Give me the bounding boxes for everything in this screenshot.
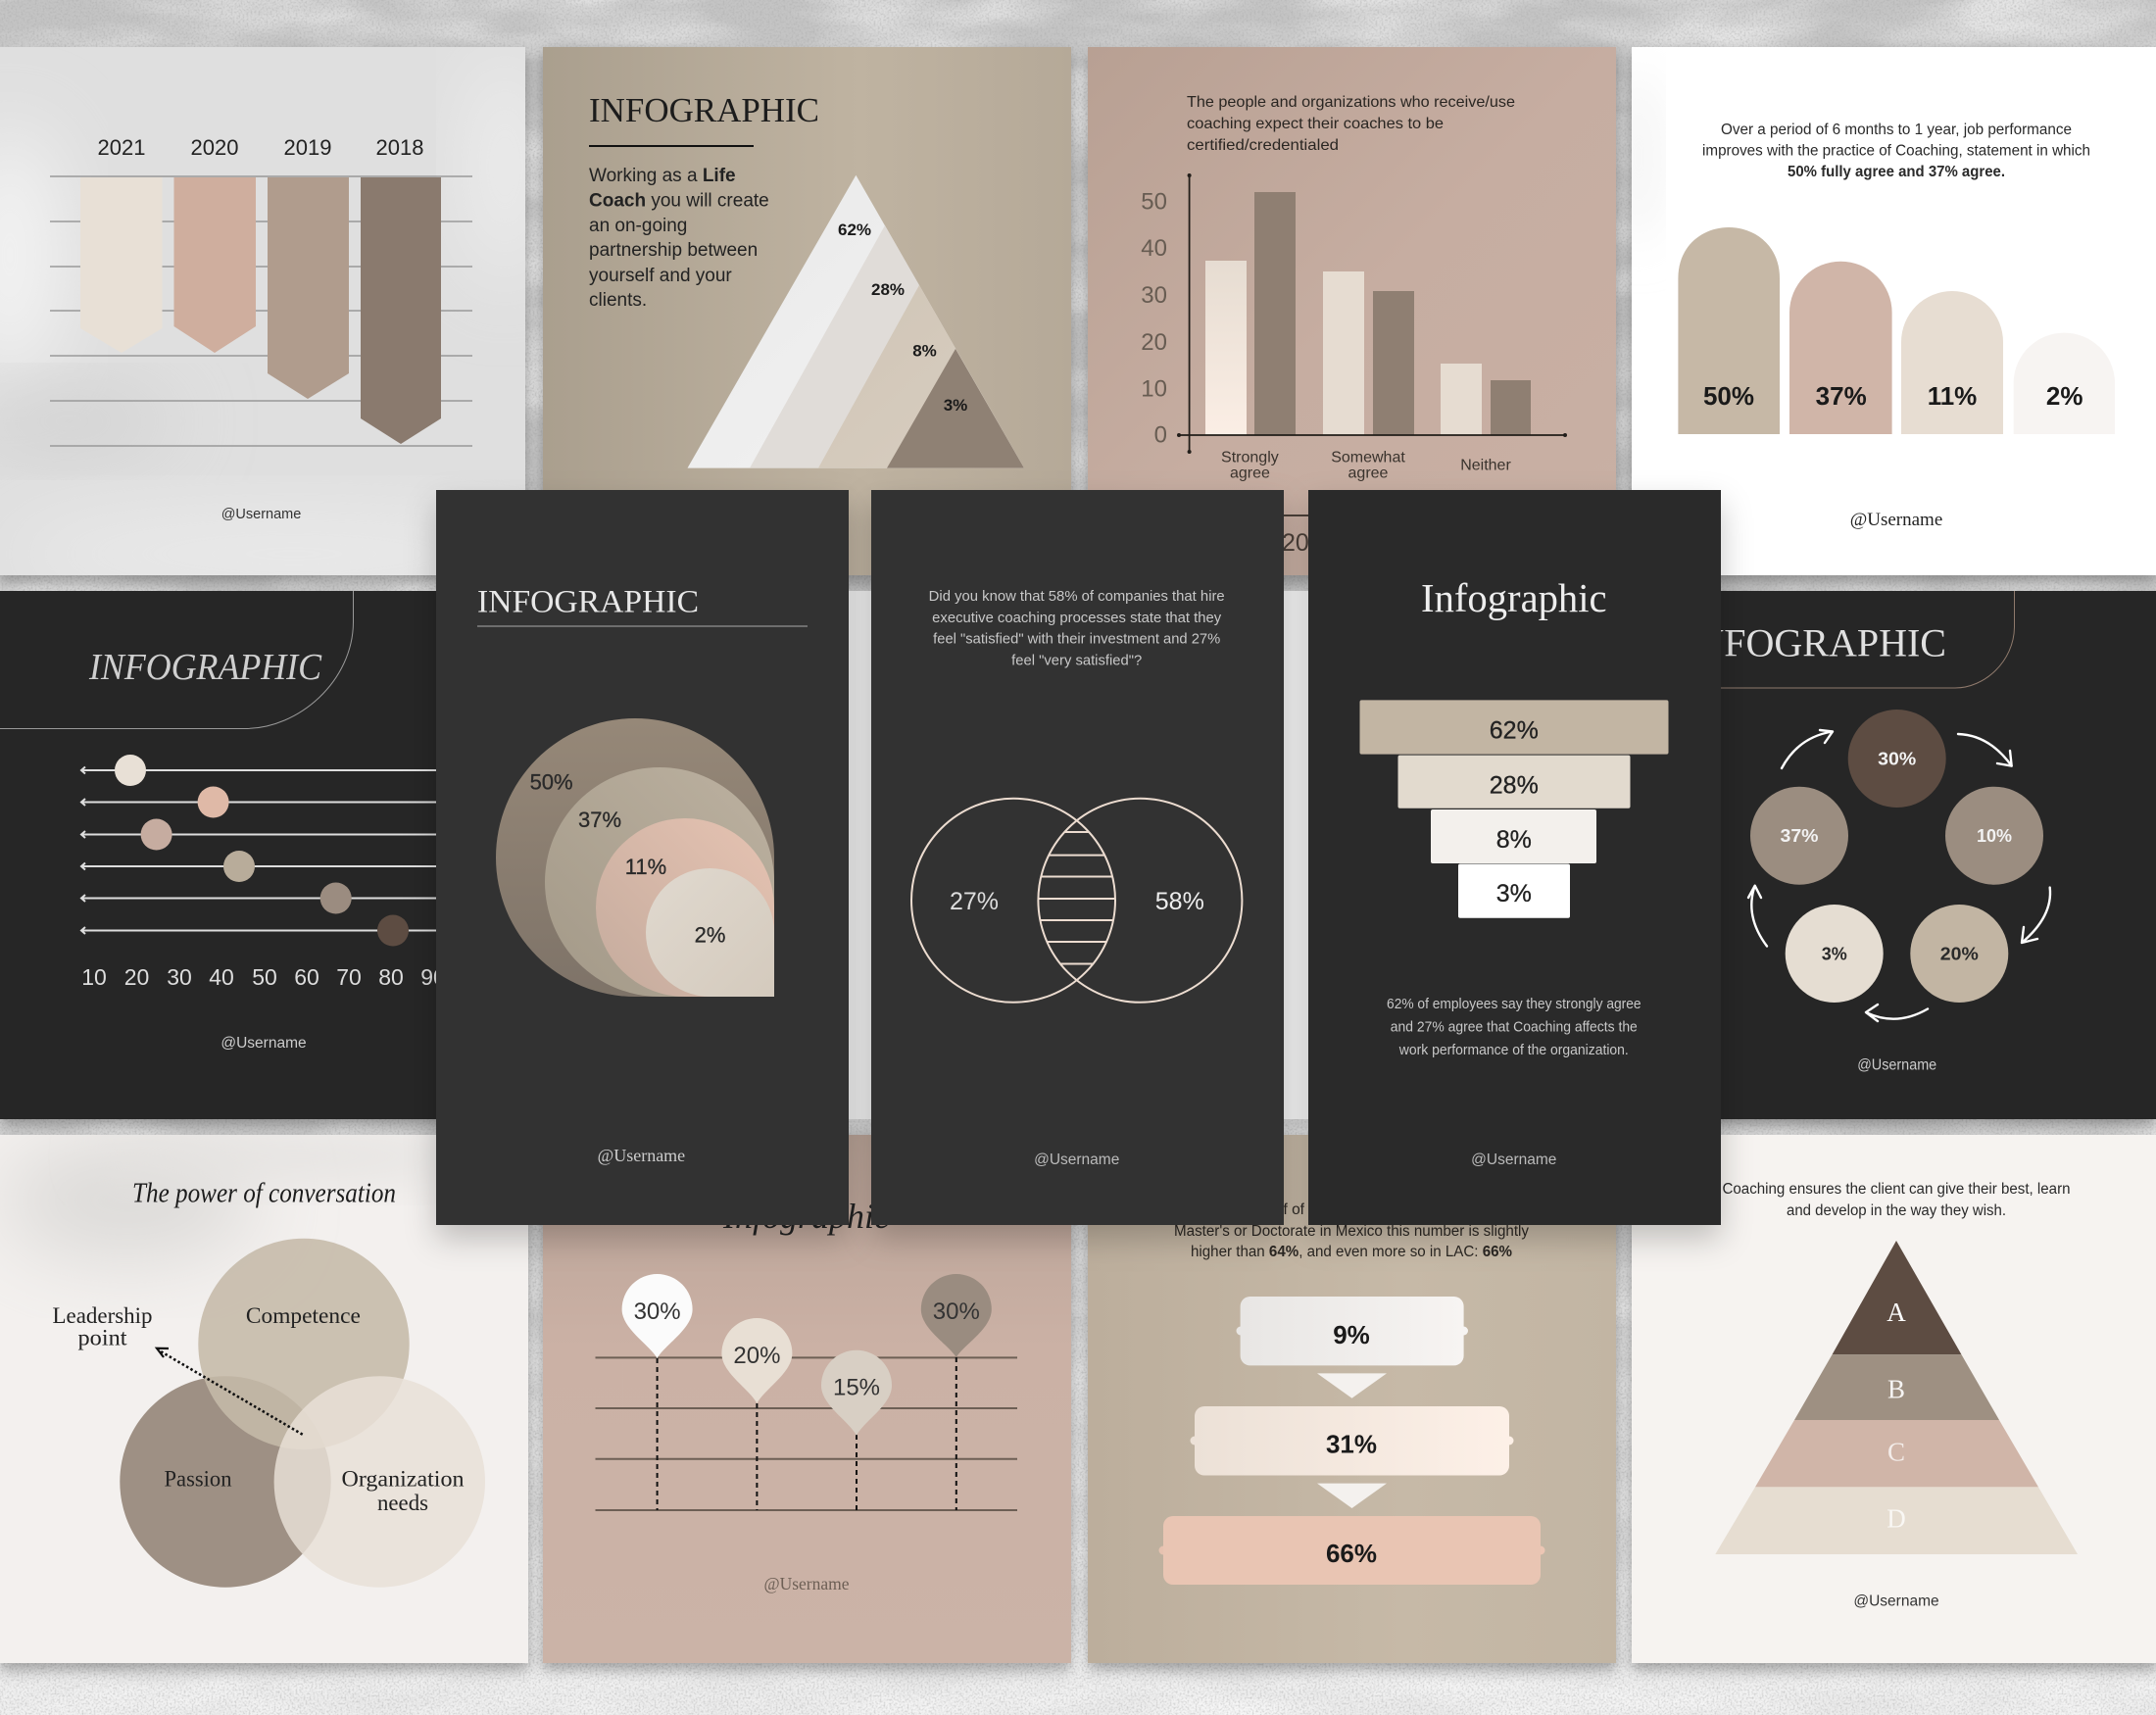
partly hidden timeline xyxy=(1264,514,1323,557)
username: @Username xyxy=(220,1035,307,1052)
arches: 11% xyxy=(1928,381,1977,411)
scale numbers: 10 xyxy=(81,964,107,990)
username: @Username xyxy=(1034,1152,1119,1168)
body text: yourself and your xyxy=(589,266,732,286)
funnel bars: 62% xyxy=(1490,717,1539,745)
cycle arrows xyxy=(1748,730,2050,1021)
y axis labels: 40 xyxy=(1141,235,1167,262)
nested drop chart xyxy=(496,718,774,997)
heading: INFOGRAPHIC xyxy=(477,585,699,620)
panel: bar chart xyxy=(1088,47,1616,575)
description: work performance of the organization. xyxy=(1398,1043,1629,1058)
username: @Username xyxy=(1857,1057,1936,1074)
description xyxy=(1702,122,2090,180)
description: 50% fully agree and 37% agree. xyxy=(1788,164,2005,180)
funnel bars xyxy=(1360,700,1668,918)
year labels: 2019 xyxy=(284,135,331,160)
arrow down xyxy=(1317,1373,1387,1398)
pyramid chart: 8% xyxy=(912,341,937,361)
panel: arch bars xyxy=(1625,47,2156,575)
arches: 2% xyxy=(2046,381,2082,411)
description xyxy=(929,589,1225,668)
venn values: 27% xyxy=(950,888,999,915)
axes xyxy=(1177,173,1567,454)
partly hidden timeline: 20 xyxy=(1282,529,1309,557)
nested drop chart: 11% xyxy=(625,855,666,879)
panel: pin chart xyxy=(543,1135,1071,1663)
scale numbers: 60 xyxy=(294,964,319,990)
pins: 20% xyxy=(733,1343,780,1369)
description: executive coaching processes state that they xyxy=(932,611,1222,626)
venn labels: Competence xyxy=(246,1303,361,1328)
dotted arrow xyxy=(157,1348,303,1435)
x axis labels: agree xyxy=(1348,465,1389,482)
description xyxy=(1174,1201,1529,1260)
pins: 15% xyxy=(833,1375,880,1401)
panel: dark slider chart xyxy=(0,591,461,1119)
venn labels: point xyxy=(78,1326,127,1350)
pins xyxy=(622,1274,992,1436)
x axis labels: Strongly xyxy=(1221,449,1279,466)
body text: an on-going xyxy=(589,216,687,236)
description: Did you know that 58% of companies that hire xyxy=(929,589,1225,605)
y axis labels: 0 xyxy=(1154,422,1167,449)
description xyxy=(1187,94,1515,154)
pyramid chart: 62% xyxy=(838,220,871,239)
scale numbers: 20 xyxy=(124,964,149,990)
slider dots xyxy=(115,755,409,947)
x axis labels: Somewhat xyxy=(1331,449,1405,466)
scale numbers: 70 xyxy=(336,964,362,990)
scale numbers: 50 xyxy=(252,964,277,990)
pyramid layers: C xyxy=(1887,1438,1905,1467)
heading: INFOGRAPHIC xyxy=(1683,621,1946,664)
year labels: 2020 xyxy=(191,135,238,160)
description: The people and organizations who receive/use xyxy=(1187,94,1515,111)
year labels xyxy=(98,135,423,160)
description: Coaching ensures the client can give their best, learn xyxy=(1723,1181,2070,1198)
description xyxy=(1723,1181,2070,1219)
box 9% xyxy=(1237,1297,1468,1365)
cycle circles: 37% xyxy=(1780,826,1819,846)
scale numbers: 80 xyxy=(378,964,404,990)
year labels: 2021 xyxy=(98,135,145,160)
body text: partnership between xyxy=(589,240,758,261)
panel: letter pyramid xyxy=(1632,1135,2156,1663)
scale numbers: 40 xyxy=(209,964,234,990)
year labels: 2018 xyxy=(376,135,423,160)
box 9%: 9% xyxy=(1333,1320,1370,1349)
grid lines xyxy=(50,176,472,446)
pyramid chart xyxy=(688,175,1024,468)
venn values: 58% xyxy=(1155,888,1204,915)
cycle circles: 20% xyxy=(1940,945,1979,964)
description xyxy=(1387,997,1642,1058)
scale numbers xyxy=(81,964,446,990)
heading: Infographic xyxy=(722,1197,890,1236)
venn labels xyxy=(53,1303,465,1515)
venn values xyxy=(950,888,1204,915)
description: improves with the practice of Coaching, statement in which xyxy=(1702,142,2090,159)
bars xyxy=(1205,192,1531,435)
username: @Username xyxy=(763,1574,850,1593)
panel: pyramid with life coach text xyxy=(543,47,1071,575)
nested drop chart: 50% xyxy=(530,770,573,794)
scale numbers: 90 xyxy=(420,964,446,990)
y axis labels: 50 xyxy=(1141,188,1167,216)
pins: 30% xyxy=(933,1298,980,1325)
funnel bars: 3% xyxy=(1496,880,1532,907)
description: feel "satisfied" with their investment and 27% xyxy=(933,632,1220,648)
nested drop chart: 2% xyxy=(695,923,725,948)
description: Over a period of 6 months to 1 year, job performance xyxy=(1721,122,2072,138)
body text: Coach you will create xyxy=(589,190,769,212)
y axis labels: 30 xyxy=(1141,282,1167,309)
arches: 37% xyxy=(1816,381,1867,411)
panel: center dark nested shapes xyxy=(436,490,849,1225)
description: coaching expect their coaches to be xyxy=(1187,116,1444,132)
panel: power of conversation venn xyxy=(0,1132,528,1663)
body text: Working as a Life xyxy=(589,166,736,186)
venn labels: Organization xyxy=(341,1467,465,1492)
pyramid layers: B xyxy=(1887,1375,1905,1404)
panel: dark cycle chart xyxy=(1683,591,2156,1119)
box 31%: 31% xyxy=(1326,1430,1377,1459)
funnel bars: 28% xyxy=(1490,771,1539,799)
arrow bars xyxy=(80,177,441,444)
username: @Username xyxy=(1850,510,1942,530)
pins: 30% xyxy=(634,1298,681,1325)
description: half of xyxy=(1263,1201,1305,1218)
description: 62% of employees say they strongly agree xyxy=(1387,997,1642,1012)
cycle circles: 10% xyxy=(1977,826,2012,846)
pyramid chart: 3% xyxy=(944,396,967,415)
body text xyxy=(589,166,769,311)
nested drop chart: 37% xyxy=(578,808,621,832)
arches: 50% xyxy=(1703,381,1754,411)
heading: Infographic xyxy=(1421,575,1607,620)
description: feel "very satisfied"? xyxy=(1011,653,1142,668)
panel: year arrows chart xyxy=(0,47,588,593)
arches xyxy=(1678,227,2115,434)
pyramid layers: A xyxy=(1886,1298,1906,1327)
body text: clients. xyxy=(589,290,647,311)
username: @Username xyxy=(1471,1152,1556,1168)
description: and 27% agree that Coaching affects the xyxy=(1391,1020,1638,1036)
heading: INFOGRAPHIC xyxy=(88,647,322,688)
x axis labels xyxy=(1221,449,1511,482)
dashed stems xyxy=(658,1357,956,1510)
panel: center dark venn xyxy=(871,490,1284,1225)
description: higher than 64%, and even more so in LAC: 66% xyxy=(1191,1244,1512,1260)
y axis labels xyxy=(1141,188,1167,449)
panel: center dark funnel xyxy=(1308,490,1721,1225)
cycle circles: 30% xyxy=(1878,749,1916,768)
heading: The power of conversation xyxy=(132,1178,396,1209)
venn labels: Leadership xyxy=(53,1303,153,1328)
box 66% xyxy=(1158,1516,1544,1585)
description: Master's or Doctorate in Mexico this number is slightly xyxy=(1174,1223,1529,1240)
box 66%: 66% xyxy=(1326,1539,1377,1568)
username: @Username xyxy=(1853,1593,1939,1610)
slider lines xyxy=(81,766,461,934)
funnel bars: 8% xyxy=(1496,826,1532,854)
box 31% xyxy=(1190,1406,1513,1476)
x axis labels: agree xyxy=(1230,465,1270,482)
grid lines xyxy=(596,1357,1017,1510)
venn circles xyxy=(120,1239,485,1588)
venn labels: needs xyxy=(377,1491,428,1515)
venn labels: Passion xyxy=(165,1467,232,1492)
cycle circles: 3% xyxy=(1822,945,1847,964)
venn diagram xyxy=(911,799,1242,1003)
scale numbers: 30 xyxy=(167,964,192,990)
heading: INFOGRAPHIC xyxy=(589,91,819,129)
pyramid layers xyxy=(1715,1241,2078,1554)
pyramid layers: D xyxy=(1886,1504,1906,1534)
description: certified/credentialed xyxy=(1187,137,1339,154)
arrow down xyxy=(1317,1484,1387,1508)
x axis labels: Neither xyxy=(1460,457,1511,474)
y axis labels: 10 xyxy=(1141,376,1167,402)
username: @Username xyxy=(598,1146,685,1165)
description: and develop in the way they wish. xyxy=(1787,1202,2006,1219)
panel: stepped boxes xyxy=(1088,1135,1616,1663)
cycle circles xyxy=(1750,710,2043,1003)
pyramid chart: 28% xyxy=(871,280,905,299)
y axis labels: 20 xyxy=(1141,329,1167,356)
panel: hidden light panels between dark cards xyxy=(843,591,1313,1119)
username: @Username xyxy=(221,507,301,522)
